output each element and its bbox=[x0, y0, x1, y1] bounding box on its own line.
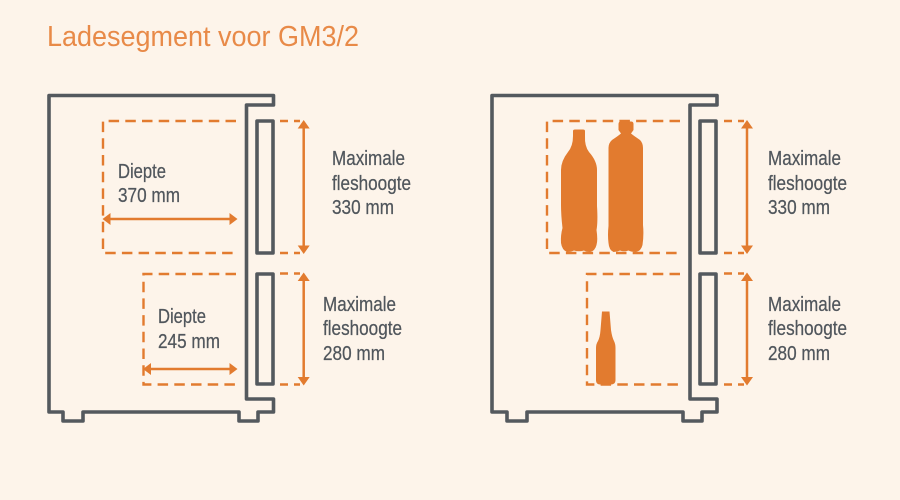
text: max height 330: Maximale bbox=[332, 147, 405, 170]
text: max height 280: Maximale bbox=[323, 293, 396, 316]
arrow: height 280 bbox=[298, 272, 310, 386]
icon: bottle 2 bbox=[608, 122, 643, 252]
upper drawer dashed outline right bbox=[547, 121, 680, 253]
arrow: height 330 right bbox=[741, 120, 753, 254]
text: max height 280: 280 mm bbox=[323, 342, 385, 365]
arrow: height 330 bbox=[298, 120, 310, 254]
cabinet outline right bbox=[492, 96, 717, 421]
text: max height 280 right bbox=[768, 293, 847, 365]
lower drawer dashed outline bbox=[144, 274, 236, 384]
cabinet outline left bbox=[49, 96, 274, 421]
lower door handle left bbox=[257, 274, 273, 384]
text: max height 330 right: fleshoogte bbox=[768, 172, 847, 195]
arrow: height 280 right bbox=[741, 272, 753, 386]
upper door handle left bbox=[257, 121, 273, 253]
title: Ladesegment voor GM3/2 bbox=[47, 21, 359, 53]
icon: bottle 1 bbox=[561, 130, 597, 252]
right dashes lower right bbox=[724, 274, 744, 384]
text: depth 245: Diepte bbox=[158, 305, 206, 328]
text: max height 280 bbox=[323, 293, 402, 365]
lower drawer dashed outline right bbox=[587, 274, 680, 384]
text: depth 370 bbox=[118, 160, 180, 207]
panel: bottles bbox=[492, 96, 847, 421]
text: max height 330 right bbox=[768, 147, 847, 219]
text: max height 330 bbox=[332, 147, 411, 219]
arrow: depth 245 bbox=[143, 363, 238, 375]
upper drawer dashed outline bbox=[103, 121, 236, 253]
panel: depth dimensions bbox=[49, 96, 411, 421]
text: depth 245 bbox=[158, 305, 220, 353]
text: depth 370: Diepte bbox=[118, 160, 166, 183]
right dashes upper right bbox=[724, 121, 744, 253]
text: depth 370: 370 mm bbox=[118, 184, 180, 207]
lower door handle right bbox=[700, 274, 716, 384]
text: max height 330 right: 330 mm bbox=[768, 196, 830, 219]
text: max height 280 right: 280 mm bbox=[768, 342, 830, 365]
icon: bottle 3 bbox=[596, 312, 616, 384]
text: max height 330: 330 mm bbox=[332, 196, 394, 219]
text: max height 280 right: Maximale bbox=[768, 293, 841, 316]
text: max height 280: fleshoogte bbox=[323, 317, 402, 340]
upper door handle right bbox=[700, 121, 716, 253]
text: max height 280 right: fleshoogte bbox=[768, 317, 847, 340]
text: max height 330 right: Maximale bbox=[768, 147, 841, 170]
right dashes upper bbox=[280, 121, 300, 253]
right dashes lower bbox=[280, 274, 300, 384]
text: max height 330: fleshoogte bbox=[332, 172, 411, 195]
text: depth 245: 245 mm bbox=[158, 330, 220, 353]
arrow: depth 370 bbox=[102, 213, 238, 225]
